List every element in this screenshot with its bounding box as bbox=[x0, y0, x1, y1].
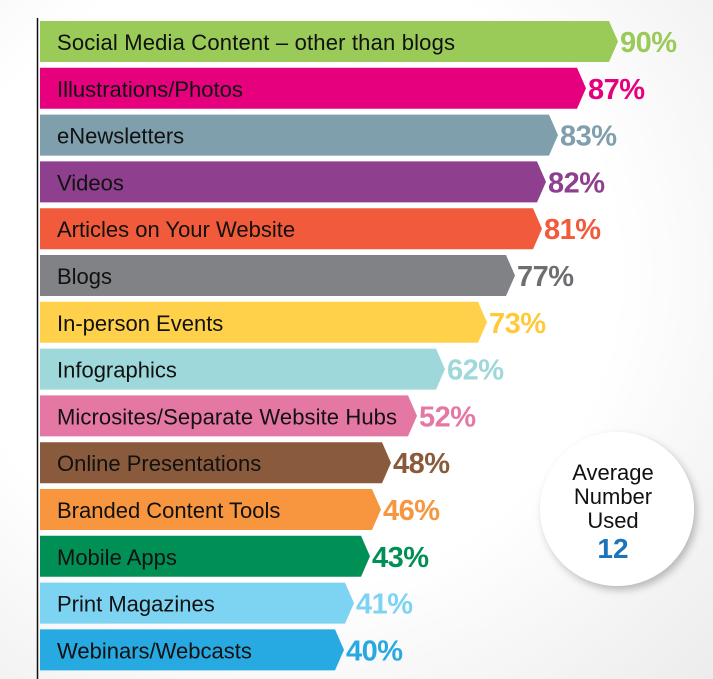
bar: microsites bbox=[40, 395, 476, 436]
bar: print magazines bbox=[40, 583, 413, 624]
callout: average number used: 12 bbox=[597, 533, 629, 564]
bar: print magazines: Print Magazines bbox=[57, 592, 215, 617]
bar: events: In-person Events bbox=[57, 311, 223, 336]
bar: branded tools: 46% bbox=[383, 495, 440, 527]
bar: mobile apps bbox=[40, 536, 429, 577]
bar: presentations: 48% bbox=[393, 448, 450, 480]
callout: average number used: Number bbox=[574, 484, 652, 509]
bar: articles: Articles on Your Website bbox=[57, 217, 295, 242]
bar: social media bbox=[40, 21, 677, 62]
bar: presentations: Online Presentations bbox=[57, 451, 261, 476]
bar: microsites: Microsites/Separate Website Hubs bbox=[57, 404, 397, 429]
bar: mobile apps: Mobile Apps bbox=[57, 545, 177, 570]
bar: webinars: Webinars/Webcasts bbox=[57, 638, 252, 663]
callout: average number used: Used bbox=[587, 508, 639, 533]
bar: blogs: 77% bbox=[517, 261, 574, 293]
bar: articles bbox=[40, 208, 601, 249]
bar: infographics: 62% bbox=[447, 355, 504, 387]
bar: blogs: Blogs bbox=[57, 264, 112, 289]
bar: webinars: 40% bbox=[346, 635, 403, 667]
bar: print magazines: 41% bbox=[356, 589, 413, 621]
bar: enewsletters: 83% bbox=[560, 121, 617, 153]
bar: videos: 82% bbox=[548, 167, 605, 199]
bar: infographics bbox=[40, 349, 504, 390]
bar: branded tools: Branded Content Tools bbox=[57, 498, 280, 523]
bar: enewsletters: eNewsletters bbox=[57, 124, 184, 149]
bar: enewsletters bbox=[40, 115, 617, 156]
bar: illustrations bbox=[40, 68, 645, 109]
bar: presentations bbox=[40, 442, 450, 483]
bar: microsites: 52% bbox=[419, 401, 476, 433]
bar: blogs bbox=[40, 255, 574, 296]
bar: illustrations: 87% bbox=[588, 74, 645, 106]
bar: infographics: Infographics bbox=[57, 358, 177, 383]
bar: branded tools bbox=[40, 489, 440, 530]
callout: average number used: Average bbox=[572, 460, 654, 485]
callout: average number used bbox=[540, 432, 694, 586]
bar: articles: 81% bbox=[544, 214, 601, 246]
bar: illustrations: Illustrations/Photos bbox=[57, 77, 243, 102]
bar: events bbox=[40, 302, 546, 343]
bar: social media: Social Media Content – other than blogs bbox=[57, 30, 455, 55]
bar: social media: 90% bbox=[620, 27, 677, 59]
bar: mobile apps: 43% bbox=[372, 542, 429, 574]
bar: events: 73% bbox=[489, 308, 546, 340]
bar: videos: Videos bbox=[57, 170, 124, 195]
bar: webinars bbox=[40, 629, 403, 670]
bar: videos bbox=[40, 161, 605, 202]
